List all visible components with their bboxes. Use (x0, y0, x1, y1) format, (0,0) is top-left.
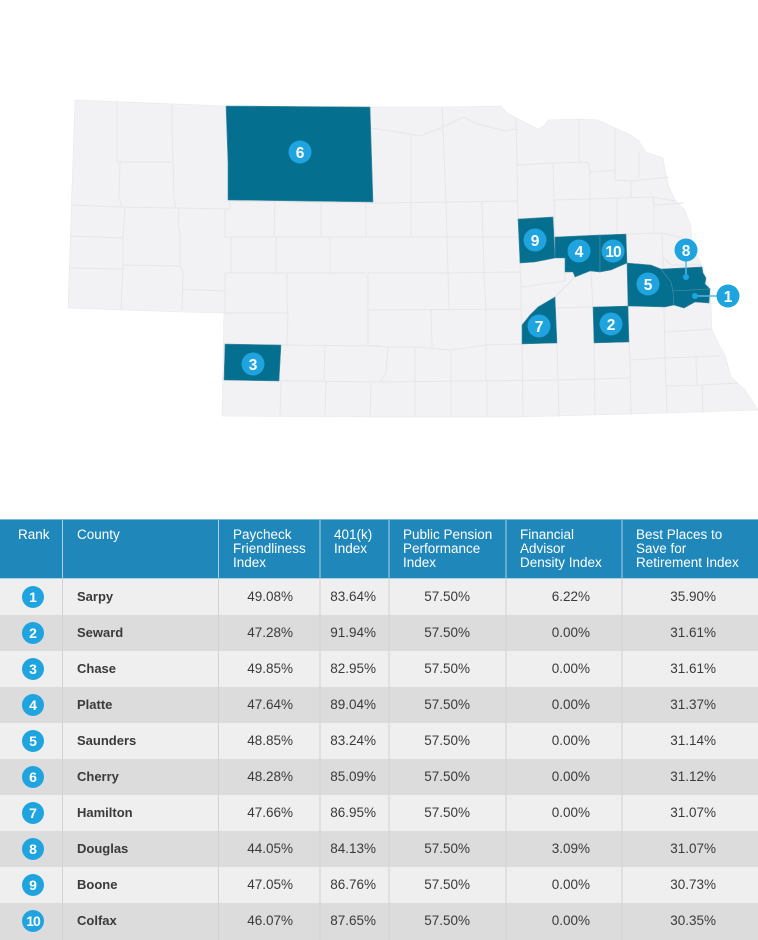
table header: Rank (18, 527, 50, 542)
row 3: Chase (22, 658, 716, 680)
county 9: Boone (518, 217, 555, 263)
table header: Density Index (520, 555, 602, 570)
row 8: Douglas: 3.09% (552, 841, 590, 856)
map of Nebraska counties (68, 100, 758, 417)
row 10: Colfax: 0.00% (552, 913, 590, 928)
row 5: Saunders: 48.85% (247, 733, 293, 748)
table header: 401(k) (334, 527, 372, 542)
row 9: Boone (22, 874, 716, 896)
row 8: Douglas: 57.50% (424, 841, 470, 856)
map marker 4: 4 (575, 244, 584, 261)
map marker 10: 10 (605, 244, 621, 261)
county 1: Sarpy (673, 289, 710, 308)
row 5: Saunders: 31.14% (670, 733, 716, 748)
row 9: Boone: 0.00% (552, 877, 590, 892)
map marker 5 (636, 272, 660, 296)
row 2: Seward: 91.94% (330, 625, 376, 640)
row 3: Chase: 49.85% (247, 661, 293, 676)
row 3: Chase: 31.61% (670, 661, 716, 676)
row 7: Hamilton: 47.66% (247, 805, 293, 820)
row 1: Sarpy: Sarpy (77, 589, 114, 604)
row 7: Hamilton: 57.50% (424, 805, 470, 820)
table header: Index (334, 541, 367, 556)
map marker 9: 9 (531, 233, 540, 250)
row 5: Saunders: 5 (29, 733, 37, 749)
table header: Public Pension (403, 527, 492, 542)
county 8: Douglas (661, 267, 710, 291)
row 8: Douglas: 84.13% (330, 841, 376, 856)
map marker 4 (568, 240, 590, 262)
row 4: Platte: 89.04% (330, 697, 376, 712)
row 7: Hamilton: 0.00% (552, 805, 590, 820)
map marker 9 (524, 228, 546, 252)
row 8: Douglas: 31.07% (670, 841, 716, 856)
county 7: Hamilton (522, 297, 557, 344)
row 10: Colfax: 10 (26, 913, 41, 929)
row 2: Seward: 0.00% (552, 625, 590, 640)
table header: Financial (520, 527, 574, 542)
table header: Index (233, 555, 266, 570)
row 2: Seward: 2 (29, 625, 37, 641)
map marker 3 (242, 352, 264, 376)
map marker 2: 2 (607, 317, 615, 334)
row 3: Chase: 0.00% (552, 661, 590, 676)
row 2: Seward: Seward (77, 625, 123, 640)
row 5: Saunders: 0.00% (552, 733, 590, 748)
row 4: Platte: 31.37% (670, 697, 716, 712)
map marker 6 (288, 140, 312, 164)
row 1: Sarpy: 57.50% (424, 589, 470, 604)
row 6: Cherry: 6 (29, 769, 37, 785)
table header: Retirement Index (636, 555, 739, 570)
row 9: Boone: 47.05% (247, 877, 293, 892)
county 5: Saunders (627, 263, 674, 307)
row 9: Boone: 86.76% (330, 877, 376, 892)
map marker 8 with leader (674, 238, 698, 280)
row 2: Seward: 31.61% (670, 625, 716, 640)
row 2: Seward (22, 622, 716, 644)
row 1: Sarpy: 35.90% (670, 589, 716, 604)
row 2: Seward: 57.50% (424, 625, 470, 640)
table header (0, 519, 758, 579)
row 6: Cherry: 31.12% (670, 769, 716, 784)
table header: Save for (636, 541, 687, 556)
map marker 1 with leader (692, 284, 740, 308)
row 6: Cherry: 0.00% (552, 769, 590, 784)
row 4: Platte (22, 694, 716, 716)
row 4: Platte: 57.50% (424, 697, 470, 712)
row 9: Boone: 30.73% (670, 877, 716, 892)
row 10: Colfax: 57.50% (424, 913, 470, 928)
row 1: Sarpy: 49.08% (247, 589, 293, 604)
table header: Friendliness (233, 541, 306, 556)
row 6: Cherry (22, 766, 716, 788)
row 10: Colfax: 46.07% (247, 913, 293, 928)
map marker 6: 6 (296, 145, 305, 162)
row 1: Sarpy: 6.22% (552, 589, 590, 604)
row 3: Chase: 82.95% (330, 661, 376, 676)
row 7: Hamilton: 31.07% (670, 805, 716, 820)
row 7: Hamilton: 86.95% (330, 805, 376, 820)
row 8: Douglas: Douglas (77, 841, 128, 856)
row 5: Saunders: Saunders (77, 733, 136, 748)
map marker 5: 5 (644, 277, 653, 294)
row 4: Platte: 0.00% (552, 697, 590, 712)
row 10: Colfax: 87.65% (330, 913, 376, 928)
table header: Paycheck (233, 527, 292, 542)
row 8: Douglas: 44.05% (247, 841, 293, 856)
map marker 7: 7 (535, 319, 543, 336)
row 10: Colfax: Colfax (77, 913, 118, 928)
row 3: Chase: Chase (77, 661, 116, 676)
row 10: Colfax (22, 910, 716, 932)
row 7: Hamilton: 7 (29, 805, 37, 821)
row 8: Douglas: 8 (29, 841, 37, 857)
row 6: Cherry: 57.50% (424, 769, 470, 784)
table header: Performance (403, 541, 480, 556)
row 9: Boone: 9 (29, 877, 37, 893)
row 6: Cherry: Cherry (77, 769, 120, 784)
county 2: Seward (593, 306, 629, 343)
row 3: Chase: 3 (29, 661, 37, 677)
row 3: Chase: 57.50% (424, 661, 470, 676)
map marker 7 (528, 314, 550, 338)
row 1: Sarpy: 83.64% (330, 589, 376, 604)
row 2: Seward: 47.28% (247, 625, 293, 640)
row 5: Saunders: 57.50% (424, 733, 470, 748)
table header: County (77, 527, 120, 542)
row 7: Hamilton (22, 802, 716, 824)
row 6: Cherry: 85.09% (330, 769, 376, 784)
row 7: Hamilton: Hamilton (77, 805, 133, 820)
ranking table (0, 519, 758, 940)
row 5: Saunders (22, 730, 716, 752)
row 5: Saunders: 83.24% (330, 733, 376, 748)
row 6: Cherry: 48.28% (247, 769, 293, 784)
row 4: Platte: Platte (77, 697, 112, 712)
table header: Index (403, 555, 436, 570)
table header: Best Places to (636, 527, 722, 542)
map marker 3: 3 (249, 357, 258, 374)
row 9: Boone: Boone (77, 877, 117, 892)
row 8: Douglas (22, 838, 716, 860)
map marker 1 with leader: 1 (724, 289, 733, 306)
county 6: Cherry (226, 106, 373, 202)
row 4: Platte: 4 (29, 697, 37, 713)
row 10: Colfax: 30.35% (670, 913, 716, 928)
row 1: Sarpy: 1 (29, 589, 37, 605)
row 1: Sarpy (22, 586, 716, 608)
row 4: Platte: 47.64% (247, 697, 293, 712)
table header: Advisor (520, 541, 566, 556)
map marker 2 (600, 312, 622, 336)
county 3: Chase (224, 344, 281, 381)
map marker 8 with leader: 8 (682, 243, 691, 260)
county 10: Colfax (600, 234, 627, 272)
map marker 10 (602, 240, 624, 262)
row 9: Boone: 57.50% (424, 877, 470, 892)
county 4: Platte (555, 235, 600, 277)
